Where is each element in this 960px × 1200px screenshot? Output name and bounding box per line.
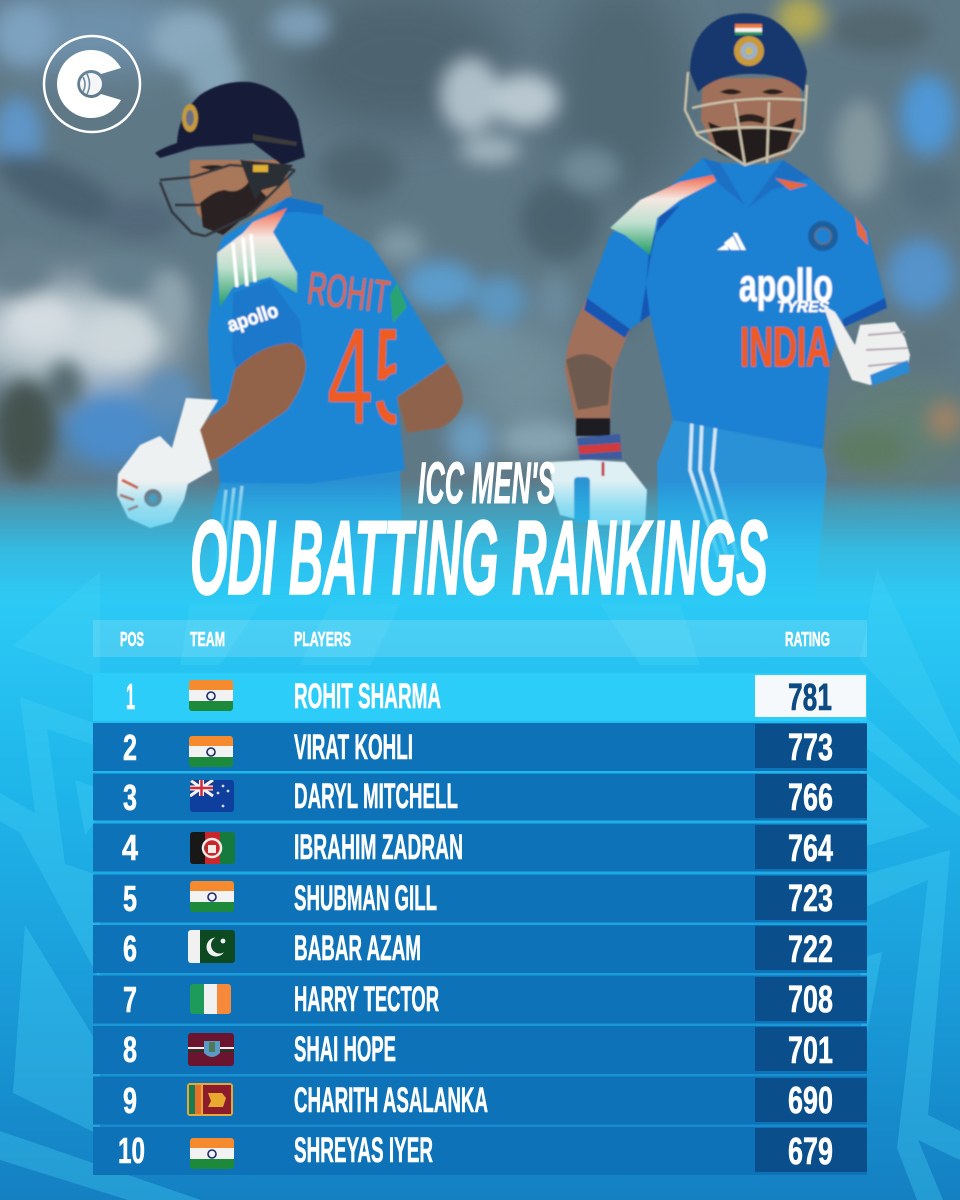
- flag: West Indies: [188, 1033, 234, 1066]
- row 10: Shreyas Iyer: [93, 1127, 867, 1175]
- shorts: [208, 462, 404, 600]
- row 3: Daryl Mitchell: 766: [788, 777, 833, 819]
- table header: PLAYERS: [294, 629, 351, 651]
- right glove: [823, 305, 910, 385]
- flag: Pakistan: [188, 930, 235, 963]
- jersey: [587, 158, 885, 449]
- row 1: Rohit Sharma: ROHIT SHARMA: [294, 677, 441, 716]
- row 6: Babar Azam: 6: [123, 928, 137, 969]
- player: Virat Kohli: INDIA: [740, 315, 830, 378]
- row 7: Harry Tector: HARRY TECTOR: [294, 980, 439, 1019]
- logo: [44, 36, 140, 132]
- row 2: Virat Kohli: 2: [123, 727, 137, 768]
- row 6: Babar Azam: 722: [788, 929, 833, 971]
- helmet: [155, 82, 305, 165]
- row 6: Babar Azam: BABAR AZAM: [294, 929, 421, 968]
- grille: [160, 165, 295, 236]
- row 4: Ibrahim Zadran: 4: [122, 827, 138, 868]
- glove: [117, 398, 218, 528]
- flag: India: [189, 736, 233, 767]
- flag: India: [189, 680, 233, 711]
- row 10: Shreyas Iyer: 679: [788, 1131, 833, 1173]
- row 8: Shai Hope: SHAI HOPE: [294, 1030, 396, 1069]
- row 8: Shai Hope: [93, 1026, 867, 1074]
- row 6: Babar Azam: [93, 925, 867, 973]
- row 10: Shreyas Iyer: 10: [118, 1130, 145, 1171]
- flag: India: [190, 881, 234, 912]
- row 5: Shubman Gill: 5: [123, 878, 137, 919]
- row 8: Shai Hope: 701: [788, 1030, 833, 1072]
- shorts: [657, 420, 827, 600]
- background: blurred stadium crowd: [0, 0, 960, 620]
- row 3: Daryl Mitchell: [93, 774, 867, 820]
- row 5: Shubman Gill: SHUBMAN GILL: [294, 879, 437, 918]
- row 4: Ibrahim Zadran: IBRAHIM ZADRAN: [294, 828, 463, 867]
- player: Rohit Sharma: apollo: [225, 300, 281, 337]
- face: [701, 78, 802, 165]
- row 7: Harry Tector: 7: [123, 979, 137, 1020]
- table header: [93, 620, 867, 657]
- flag: Afghanistan: [190, 832, 235, 864]
- player: Rohit Sharma: 45: [327, 300, 419, 452]
- flag: India: [190, 1138, 234, 1169]
- row 7: Harry Tector: [93, 976, 867, 1024]
- player: Virat Kohli: [550, 13, 910, 600]
- row 1: Rohit Sharma: [93, 673, 867, 721]
- row 2: Virat Kohli: 773: [788, 727, 833, 769]
- tricolor shoulder: [217, 208, 297, 307]
- player: Virat Kohli: TYRES: [777, 299, 829, 316]
- row 4: Ibrahim Zadran: 764: [788, 828, 833, 870]
- row 3: Daryl Mitchell: 3: [123, 777, 137, 818]
- row 2: Virat Kohli: VIRAT KOHLI: [294, 728, 413, 767]
- flag: Ireland: [190, 984, 231, 1014]
- table header: POS: [120, 629, 144, 651]
- row 3: Daryl Mitchell: DARYL MITCHELL: [294, 777, 458, 816]
- table header: TEAM: [190, 629, 225, 651]
- wristband: [576, 418, 610, 436]
- neck and face: [190, 160, 292, 227]
- lower glove: [550, 460, 647, 525]
- player: Rohit Sharma: [117, 82, 463, 600]
- tricolor shoulder: [610, 175, 716, 255]
- text: ICC MEN'S: [418, 451, 555, 516]
- row 5: Shubman Gill: [93, 874, 867, 922]
- grille: [685, 72, 807, 165]
- row 9: Charith Asalanka: CHARITH ASALANKA: [294, 1081, 488, 1120]
- left arm: [180, 343, 306, 467]
- flag: Sri Lanka: [187, 1083, 233, 1116]
- flag: New Zealand: [190, 780, 234, 812]
- row 1: Rohit Sharma: 1: [126, 676, 135, 717]
- row 7: Harry Tector: 708: [788, 979, 833, 1021]
- fade overlay into panel: [0, 480, 960, 605]
- row 1: Rohit Sharma: 781: [788, 677, 832, 719]
- right arm: [397, 363, 463, 433]
- row 4: Ibrahim Zadran: [93, 824, 867, 872]
- panel: blue geometric background: [0, 568, 960, 1200]
- row 8: Shai Hope: 8: [123, 1029, 137, 1070]
- badge: [808, 221, 838, 251]
- shirt name and number: ROHIT: [305, 261, 393, 323]
- sponsor: apollo: [739, 259, 833, 311]
- helmet: [690, 13, 807, 92]
- table header: RATING: [785, 629, 830, 651]
- row 9: Charith Asalanka: 690: [788, 1080, 833, 1122]
- arm: [565, 298, 630, 420]
- row 10: Shreyas Iyer: SHREYAS IYER: [294, 1131, 433, 1170]
- sleeve: [232, 280, 303, 370]
- row 5: Shubman Gill: 723: [788, 878, 833, 920]
- jersey: [208, 197, 447, 484]
- row 2: Virat Kohli: [93, 723, 867, 771]
- adidas logo: [717, 233, 746, 250]
- row 9: Charith Asalanka: 9: [123, 1080, 137, 1121]
- row 9: Charith Asalanka: [93, 1076, 867, 1124]
